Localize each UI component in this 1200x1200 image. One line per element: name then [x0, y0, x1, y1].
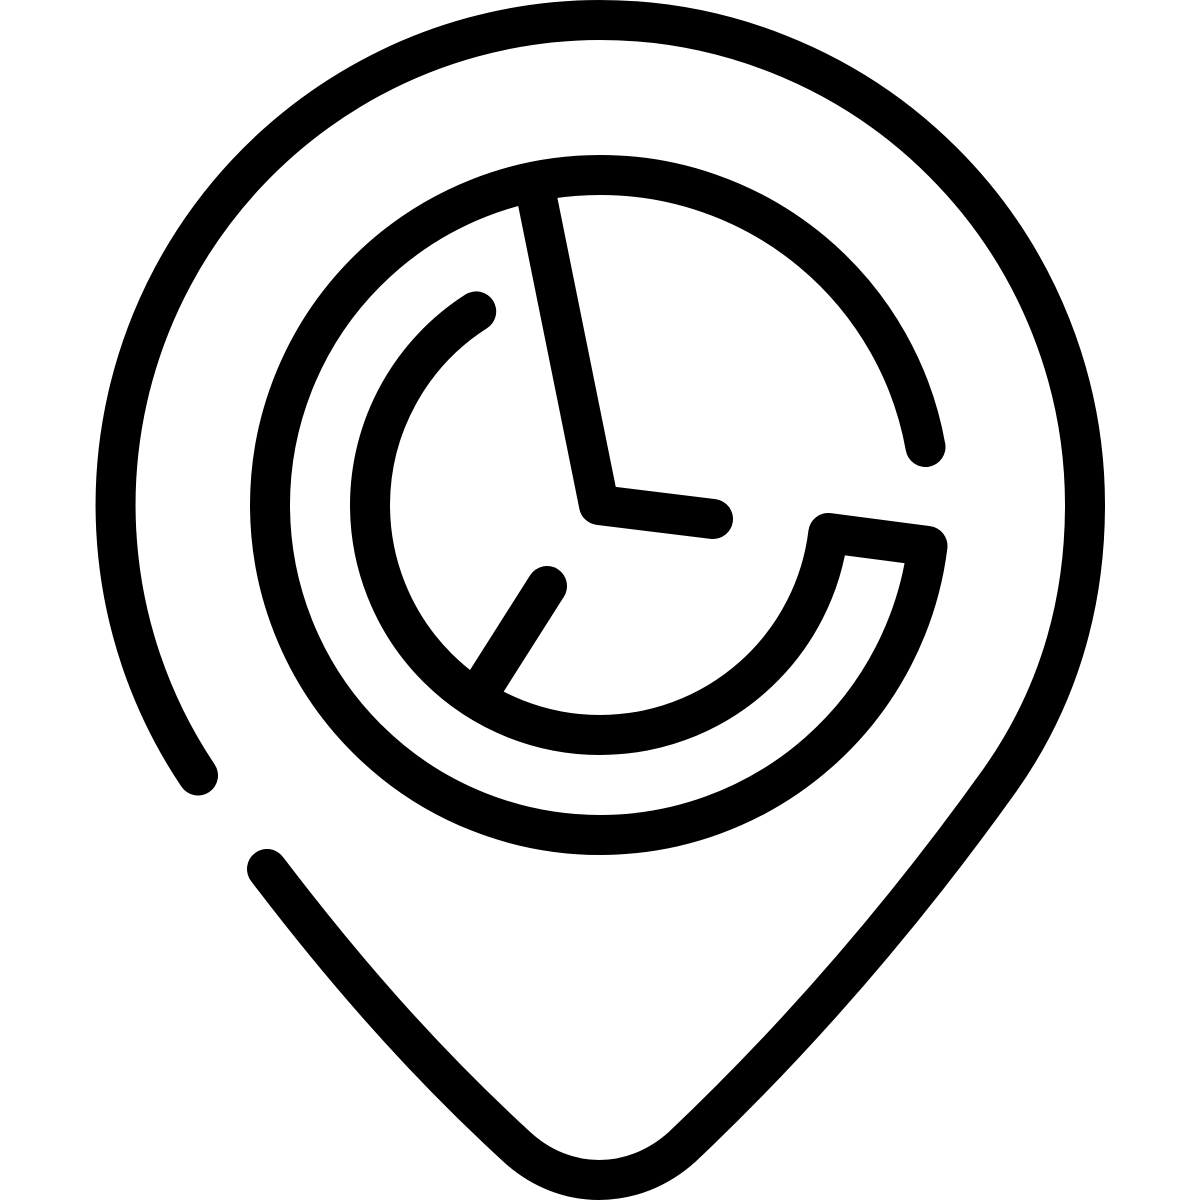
- clock face outer ring and inner ring: [270, 175, 928, 835]
- clock hands: [536, 193, 713, 519]
- clock tick mark: [481, 586, 547, 690]
- pin outline: [116, 20, 1085, 1180]
